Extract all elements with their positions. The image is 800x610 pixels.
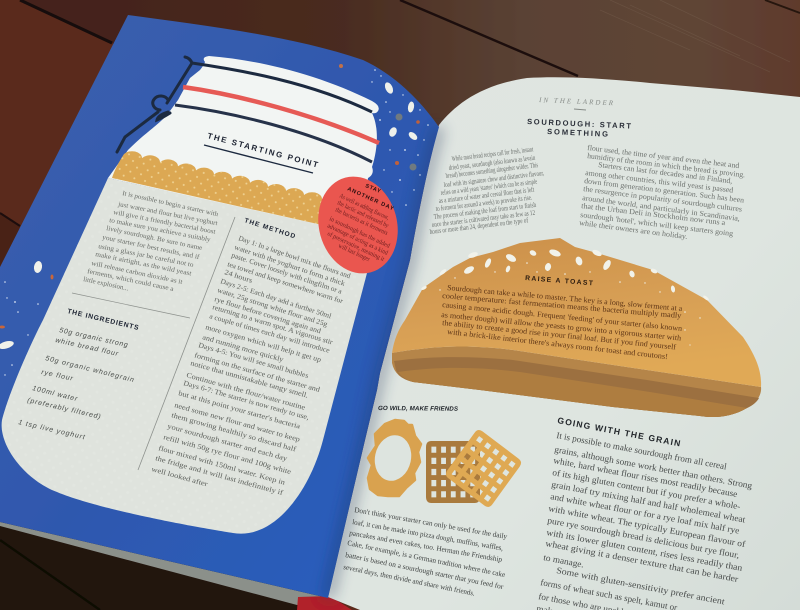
text block: intro column: make it airtight, as the wild yeast: [95, 251, 192, 278]
divider above ingredients: [72, 293, 190, 318]
decoration: scattered seeds on blue page: [0, 64, 429, 376]
text block: going with the grain: [536, 430, 754, 610]
text block: sourdough column two: down from generation to generation. Such has been: [584, 176, 745, 205]
text block: intro column: lively sourdough. Be sure to name: [106, 225, 203, 252]
text block: sourdough column one: [429, 145, 545, 236]
heading: sourdough start something: SOURDOUGH: START: [527, 117, 632, 131]
heading: the method: THE METHOD: [243, 217, 296, 240]
list: ingredients: white bread flour: [55, 337, 119, 358]
text block: going with the grain: white, hard wheat flour rises most readily because: [553, 455, 738, 499]
text block: sourdough column one: loaf with its signature chew and distinctive flavour,: [443, 169, 545, 189]
column divider: [138, 217, 235, 470]
text block: sourdough column two: around the world, and particularly in Scandinavia,: [582, 193, 741, 223]
jar lower cream panel: [2, 178, 372, 534]
callout: stay another day: ANOTHER DAY: [346, 186, 395, 212]
callout: stay another day: [308, 168, 408, 282]
heading: sourdough start something: SOMETHING: [547, 127, 608, 139]
heading: raise a toast: RAISE A TOAST: [525, 275, 594, 287]
text block: intro column: will release carbon dioxide as it: [91, 260, 183, 286]
heading: sourdough start something: [527, 117, 632, 139]
text block: sourdough column one: The process of making the loaf from start to finish: [433, 201, 537, 221]
loaf crust bands: [392, 347, 761, 417]
text block: method steps: 24 hours: [223, 268, 254, 285]
text block: method steps: paste. Cover loosely with clingfilm or a: [230, 251, 344, 296]
right page: [328, 77, 800, 610]
text block: method steps: rye flour before covering again and: [213, 295, 322, 335]
text block: sourdough column two: Starters can last for decades and in Finland,: [598, 160, 733, 185]
text block: raise a toast: Sourdough can take a while to master. The key is a long, slow ferment at a: [447, 283, 683, 313]
text block: sourdough column two: humidity of the room in which the bread is proving.: [587, 151, 746, 179]
book page edge: [0, 522, 328, 605]
list: ingredients: [18, 327, 135, 441]
cream dot texture: [2, 178, 372, 534]
illustration: bread loaf: [392, 238, 761, 417]
callout: stay another day: advantage of acting as a kind: [326, 222, 390, 257]
text block: going with the grain: grain loaf try mixing half and half wholemeal wheat: [551, 479, 747, 525]
text block: intro column: just water and flour but live yoghurt: [117, 201, 218, 227]
text block: go wild: several days, then divide and share with friends.: [343, 562, 476, 598]
text block: intro column: little explosion...: [83, 276, 129, 293]
text block: method steps: more oxygen which will help it get up: [204, 323, 322, 364]
text block: method steps: water, 25g strong white flour and 25g: [216, 286, 329, 329]
text block: go wild: batter is based on a sourdough starter that you feed for: [345, 550, 505, 591]
text block: method steps: them growing healthily so discard half: [170, 411, 298, 454]
text block: sourdough column one: While most bread recipes call for fresh, instant: [451, 145, 534, 163]
text block: method steps: water with the yoghurt to form a thick: [233, 243, 346, 288]
loaf lower band: [398, 368, 747, 417]
text block: method steps: Days 6-7: The starter is now ready to use,: [182, 379, 310, 422]
text block: method steps: and running more quickly: [201, 333, 285, 364]
text block: method steps: Days 2-5: Each day add a further 50ml: [219, 277, 332, 320]
text block: method steps: flour mixed with 150ml water. Keep in: [157, 444, 286, 487]
text block: going with the grain: and white wheat flour or for a rye loaf mix half rye: [550, 491, 740, 536]
text block: method steps: your sourdough starter and each day: [166, 422, 289, 463]
jar lower dark band: [175, 105, 372, 162]
text block: intro column: [83, 190, 219, 293]
text block: raise a toast: [441, 283, 683, 361]
callout: stay another day: of preservative, meaning it: [326, 230, 385, 263]
text block: intro column: It is possible to begin a starter with: [122, 190, 219, 218]
text block: sourdough column two: while their owners are on holiday.: [579, 218, 688, 241]
list: ingredients: rye flour: [41, 369, 74, 383]
text block: sourdough column one: as a mixture of water and cereal flour that is left: [438, 186, 535, 205]
text block: sourdough column one: once the starter is cultivated may take as few as 12: [431, 209, 536, 229]
text block: going with the grain: with white wheat. The typically European flavour of: [548, 503, 746, 549]
text block: intro column: ferments, which could cause a: [87, 268, 174, 293]
text block: method steps: refill with 50g rye flour and 100g white: [162, 433, 292, 476]
heading: the ingredients: THE INGREDIENTS: [67, 308, 140, 332]
jar top dark band: [192, 63, 372, 112]
text block: sourdough column one: hours or more than 24, dependent on the type of: [429, 216, 529, 236]
text block: method steps: [150, 234, 352, 497]
text block: sourdough column two: flour used, the time of year and even the heat and: [587, 143, 740, 170]
list: ingredients: 1 tsp live yoghurt: [18, 419, 86, 441]
callout: stay another day: As well as adding flavour,: [338, 192, 390, 222]
heading: go wild, make friends: GO WILD, MAKE FRIENDS: [378, 405, 459, 413]
text block: raise a toast: as mother dough) will allow the yeasts to grow into a vigorous starter with: [441, 310, 682, 343]
loaf seeds: [421, 248, 710, 346]
honey scallop band: [112, 151, 340, 229]
list: ingredients: 50g organic wholegrain: [45, 355, 135, 384]
panel: jar illustration: [2, 56, 379, 534]
text block: sourdough column two: the resurgence in popularity of sourdough cultures: [583, 184, 743, 214]
text block: sourdough column one: to ferment for around a week) to provoke its rise.: [435, 194, 533, 213]
jar red band: [183, 87, 379, 143]
text block: method steps: tea towel and keep somewhere warm for: [226, 260, 345, 305]
red ribbon: [297, 596, 352, 610]
text block: method steps: notice that unmistakable tangy smell.: [189, 359, 309, 400]
loaf top: [392, 238, 761, 387]
list: ingredients: 50g organic strong: [59, 327, 129, 349]
text block: method steps: a couple of times each day will introduce: [208, 312, 331, 355]
icon: doughnut: [368, 420, 421, 496]
text block: go wild: Cake, for example, is a German tradition where the cake: [347, 538, 507, 579]
jar wire clasp: [117, 57, 192, 152]
page header: in the larder: IN THE LARDER: [538, 96, 614, 107]
text block: going with the grain: of its high gluten content but if you prefer a whole-: [552, 467, 741, 511]
text block: sourdough column two: [579, 143, 746, 241]
callout: stay another day: the bacteria as it ferments: [334, 206, 389, 237]
list: ingredients: 100ml water: [32, 385, 78, 403]
heading: the starting point: THE STARTING POINT: [206, 131, 319, 169]
text block: go wild: pancakes and even cakes, too. Herman the Friendship: [349, 528, 503, 564]
heading: going with the grain: GOING WITH THE GRAIN: [557, 415, 681, 448]
text block: method steps: Day 1: In a large bowl mix the flours and: [237, 234, 352, 280]
text block: go wild: Don't think your starter can only be used for the daily: [354, 505, 508, 541]
icon: front waffle: [444, 428, 523, 509]
text block: method steps: returning to a warm spot. A vigorous stir: [211, 303, 334, 347]
text block: go wild: loaf, it can be made into pizza dough, muffins, waffles,: [352, 517, 504, 553]
text block: raise a toast: causing a more acidic dough. Frequent 'feeding' of your starter (also known: [442, 300, 683, 333]
left blue page: [0, 15, 439, 598]
text block: method steps: forming on the surface of the starter and: [193, 351, 321, 394]
text block: go wild: [343, 505, 508, 598]
callout: stay another day: in sourdough has the added: [328, 215, 392, 250]
text block: going with the grain: wheat giving it a denser texture that can be harder: [545, 538, 739, 584]
gutter shadow: [328, 127, 439, 598]
text block: going with the grain: pure rye sourdough bread is delicious but rye flour,: [547, 515, 740, 560]
text block: sourdough column one: bread) becomes something altogether wilder. This: [445, 161, 539, 180]
text block: intro column: will give it a friendly bacterial boost: [113, 209, 216, 236]
text block: method steps: the fridge and it will last indefinitely if: [154, 454, 285, 497]
text block: raise a toast: the ability to create a good rise in your final loaf. But if you find yourself: [442, 318, 677, 352]
callout: stay another day: STAY: [364, 183, 382, 195]
text block: method steps: but at this point your starter's bacteria: [177, 389, 302, 431]
text block: intro column: to make sure you achieve a suitably: [109, 217, 212, 244]
text block: raise a toast: with a brick-like interior there's always room for toast and croutons!: [447, 327, 668, 361]
text block: going with the grain: to manage.: [543, 552, 585, 570]
text block: going with the grain: with its lower gluten content, rises less readily than: [546, 527, 744, 573]
jar glass upper white: [108, 56, 379, 235]
callout: stay another day: the lactic and released by: [336, 199, 390, 230]
text block: method steps: Days 4-5: You will see small bubbles: [197, 341, 310, 380]
text block: sourdough column two: sourdough 'hotel', which will keep starters going: [580, 210, 734, 238]
text block: method steps: well looked after: [150, 465, 209, 489]
text block: going with the grain: Some with gluten-sensitivity prefer ancient: [556, 565, 726, 607]
text block: raise a toast: cooler temperature: fast fermentation means the bacteria multiply madly: [442, 291, 682, 320]
text block: sourdough column one: relies on a wild yeast 'starter' (which can be as simple: [440, 178, 538, 197]
text block: sourdough column two: among other countries, this wild yeast is passed: [585, 168, 734, 195]
text block: going with the grain: grains, although some work better than others. Strong: [554, 444, 754, 491]
text block: method steps: Continue with the flour/water routine: [185, 371, 306, 412]
icon: back waffle: [426, 441, 480, 503]
text block: intro column: using a glass jar be careful not to: [98, 243, 195, 269]
callout: stay another day: will last longer: [337, 242, 372, 263]
loaf dark band: [394, 357, 759, 417]
text block: sourdough column one: dried yeast, sourdough (also known as levain: [448, 154, 536, 172]
honey dots: [112, 151, 340, 229]
text block: method steps: need some new flour and water to keep: [173, 401, 301, 444]
list: ingredients: (preferably filtered): [27, 397, 101, 421]
text block: sourdough column two: that the Urban Deli in Stockholm now runs a: [581, 201, 726, 227]
text block: going with the grain: It is possible to make sourdough from all cereal: [556, 430, 728, 472]
text block: intro column: your starter for best results, and if: [102, 234, 201, 261]
